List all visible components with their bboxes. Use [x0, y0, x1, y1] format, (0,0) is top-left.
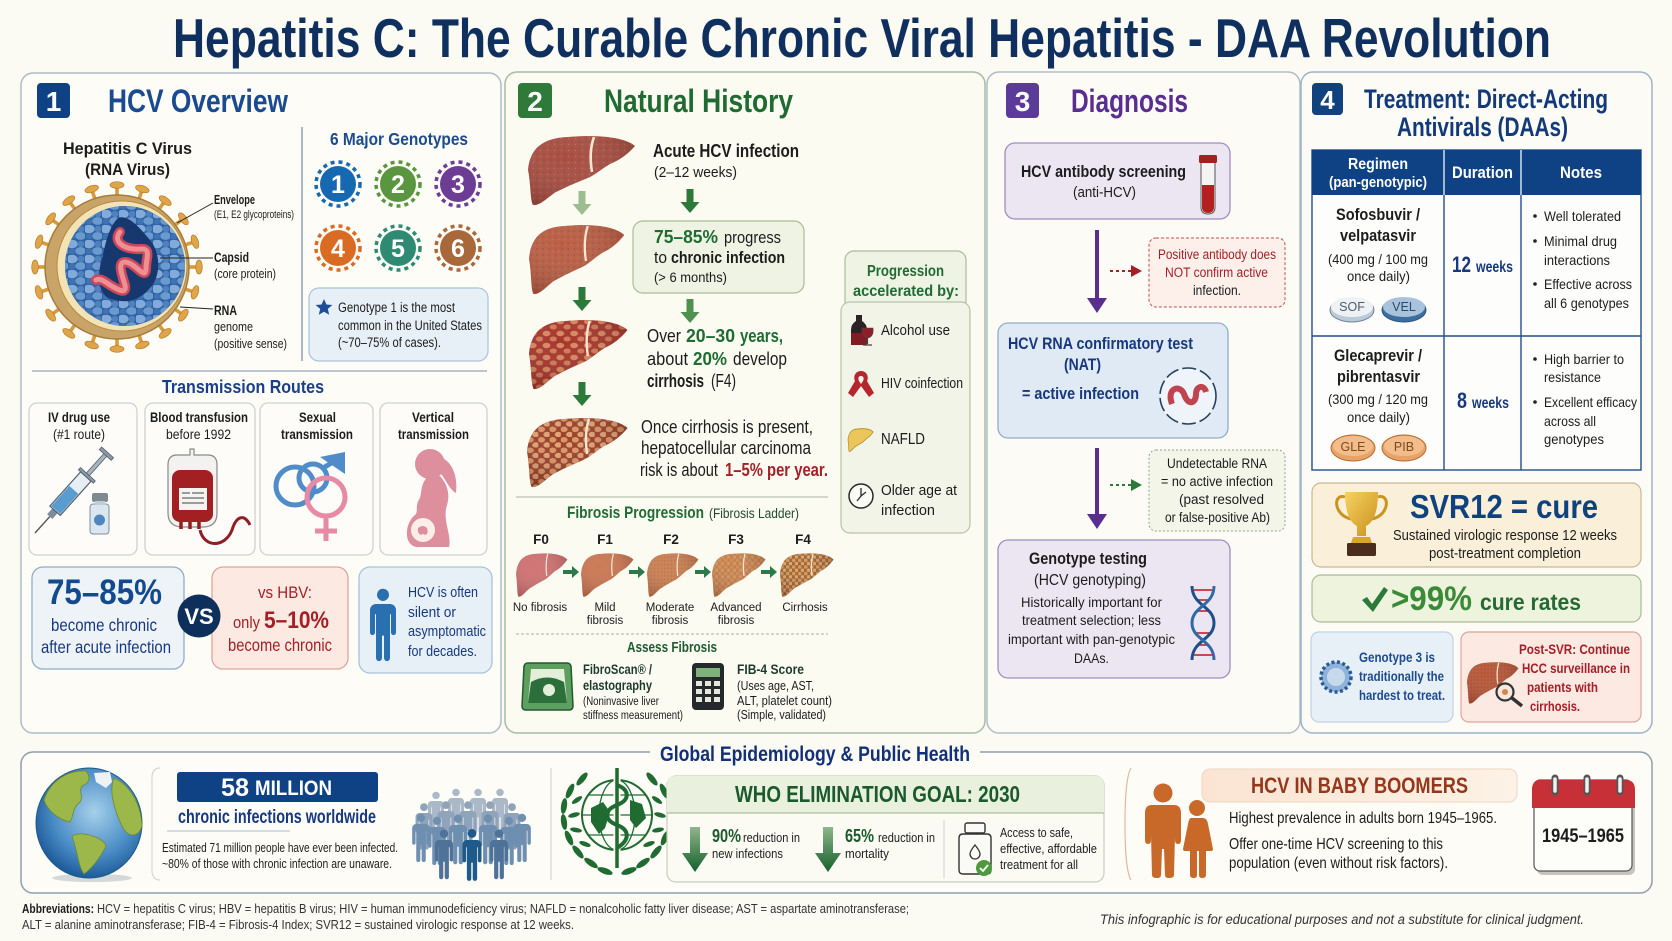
- stat: vs HBV: vs HBV:: [258, 584, 312, 602]
- callout: silent infection: for decades.: [408, 643, 477, 660]
- callout: genotype 1 note: [309, 288, 488, 361]
- callout: silent infection: silent or: [408, 604, 456, 621]
- sidebar: progression accelerators: Older age at: [881, 482, 958, 499]
- arrow: dashed red: [1110, 265, 1142, 277]
- row: sofosbuvir velpatasvir: Sofosbuvir /: [1336, 205, 1420, 224]
- step: antibody screening: [1005, 143, 1230, 219]
- footer: abbreviations: ALT = alanine aminotransferase; FIB-4 = Fibrosis-4 Index; SVR12 = sustained virologic response at 12 weeks.: [22, 918, 574, 932]
- card: blood transfusion: [145, 403, 255, 555]
- icon: virus: [1321, 662, 1351, 692]
- box: HCV in baby boomers: HCV IN BABY BOOMERS: [1251, 773, 1468, 798]
- callout: SVR12 equals cure: post-treatment completion: [1429, 546, 1581, 562]
- icon: pregnant silhouette: [407, 449, 456, 547]
- text: acute infection: (2–12 weeks): [654, 164, 737, 181]
- callout: post-SVR surveillance: cirrhosis.: [1530, 698, 1580, 714]
- box: progress to chronic: 75–85%: [654, 226, 718, 247]
- step: antibody screening: HCV antibody screening: [1021, 162, 1186, 181]
- row: glecaprevir pibrentasvir: High barrier to: [1544, 351, 1624, 367]
- virus labels: (E1, E2 glycoproteins): [214, 209, 294, 221]
- stat: 75-85 percent chronic: [32, 567, 184, 669]
- card: blood transfusion: Blood transfusion: [150, 410, 248, 425]
- box: HCV in baby boomers: Offer one-time HCV screening to this: [1229, 836, 1443, 853]
- callout: undetectable RNA: (past resolved: [1179, 492, 1264, 507]
- callout: post-SVR surveillance: Post-SVR: Continue: [1519, 641, 1630, 657]
- callout: silent infection: HCV is often: [408, 584, 478, 601]
- goal: 65 percent: 65%: [845, 826, 874, 846]
- goal: 90 percent: 90%: [712, 826, 741, 846]
- text: acute infection: [653, 141, 799, 181]
- row: glecaprevir pibrentasvir: genotypes: [1544, 431, 1604, 447]
- text: HCC risk: 1–5% per year.: [725, 460, 828, 480]
- icon: stage 4 liver: [527, 418, 628, 487]
- panel 2 heading: Natural History: [604, 83, 793, 119]
- goal: access to treatment: effective, affordable: [1000, 841, 1097, 856]
- row: glecaprevir pibrentasvir: [1328, 346, 1637, 461]
- icon: VS badge: VS: [184, 604, 214, 629]
- icon: person: [370, 589, 396, 661]
- arrow: dashed green: [1110, 479, 1142, 491]
- transmission routes heading: Transmission Routes: [162, 377, 324, 397]
- text: FIB-4 score: (Simple, validated): [737, 708, 826, 722]
- table: DAA regimens: Duration: [1452, 163, 1513, 182]
- card: vertical transmission: transmission: [398, 427, 469, 442]
- step: antibody screening: (anti-HCV): [1073, 184, 1136, 201]
- icon: DNA helix: [1192, 586, 1214, 660]
- card: blood transfusion: before 1992: [166, 427, 231, 442]
- text: FibroScan: [583, 662, 683, 722]
- stat: vs HBV: [212, 567, 348, 669]
- chart: fibrosis ladder: fibrosis: [587, 615, 623, 627]
- text: cirrhosis progression: [647, 325, 787, 391]
- virus labels: [160, 193, 294, 351]
- box: HCV in baby boomers: Highest prevalence in adults born 1945–1965.: [1229, 810, 1497, 827]
- box: progress to chronic: (> 6 months): [654, 269, 727, 285]
- callout: cure rates: >99%: [1391, 580, 1472, 618]
- panel 3 heading: 3: [1015, 86, 1030, 117]
- box: progress to chronic: progress: [724, 228, 781, 247]
- icon: crowd of people: [412, 789, 531, 881]
- stat: vs HBV: 5–10%: [264, 607, 329, 634]
- stat: 58 million: 58: [221, 774, 249, 802]
- stat: 75-85 percent chronic: become chronic: [51, 615, 157, 635]
- row: sofosbuvir velpatasvir: Minimal drug: [1544, 233, 1617, 249]
- card: sexual transmission: Sexual: [299, 410, 336, 425]
- card: sexual transmission: transmission: [281, 427, 353, 442]
- callout: silent infection: [359, 567, 492, 673]
- callout: undetectable RNA: [1149, 450, 1285, 531]
- row: glecaprevir pibrentasvir: 8: [1457, 388, 1467, 413]
- callout: SVR12 equals cure: Sustained virologic response 12 weeks: [1393, 528, 1617, 544]
- callout: genotype 1 note: (~70–75% of cases).: [338, 335, 441, 350]
- panel 2 heading: 2: [527, 86, 543, 117]
- row: sofosbuvir velpatasvir: weeks: [1475, 259, 1513, 276]
- panel 3 heading: [1006, 83, 1188, 119]
- icon: syringe and vial: [28, 446, 115, 540]
- row: sofosbuvir velpatasvir: (400 mg / 100 mg: [1328, 251, 1428, 267]
- callout: undetectable RNA: Undetectable RNA: [1167, 456, 1267, 471]
- icon: VS badge: [178, 594, 220, 638]
- arrows: natural history flow: [572, 189, 700, 406]
- stat: 75-85 percent chronic: after acute infection: [41, 637, 171, 657]
- step: genotype testing: important with pan-genotypic: [1008, 631, 1175, 647]
- goal: 90 percent: new infections: [712, 846, 783, 861]
- icon: SOF and VEL pills: VEL: [1392, 300, 1416, 314]
- sidebar: progression accelerators: Progression: [867, 263, 944, 280]
- text: cirrhosis progression: years,: [740, 325, 783, 346]
- row: glecaprevir pibrentasvir: Glecaprevir /: [1334, 346, 1422, 365]
- row: sofosbuvir velpatasvir: Effective across: [1544, 276, 1632, 292]
- arrow: to RNA test: [1087, 230, 1107, 313]
- icon: check mark: [1362, 587, 1388, 612]
- text: HCC risk: [640, 417, 828, 480]
- card: vertical transmission: Vertical: [412, 410, 454, 425]
- icons: six genotype badges: 2: [391, 171, 405, 199]
- goal: access to treatment: treatment for all: [1000, 857, 1078, 872]
- icon: fatty liver: [848, 429, 873, 451]
- footer: abbreviations: [22, 902, 909, 932]
- goal: 90 percent: reduction in: [743, 831, 800, 845]
- panel: 1 HCV overview: [21, 73, 501, 733]
- icon: SOF and VEL pills: [1330, 297, 1426, 322]
- icon: HCV virus particle: [32, 182, 202, 352]
- chart: fibrosis ladder: fibrosis: [652, 615, 688, 627]
- callout: post-SVR surveillance: patients with: [1527, 679, 1598, 695]
- goal: 65 percent: reduction in: [878, 831, 935, 845]
- stat: 58 million: ~80% of those with chronic infection are unaware.: [162, 856, 392, 871]
- box: HCV in baby boomers: [1202, 769, 1517, 872]
- box: progress to chronic: [633, 221, 804, 293]
- card: vertical transmission: [380, 403, 487, 555]
- icons: six genotype badges: 5: [391, 235, 405, 263]
- icon: trophy: [1337, 492, 1386, 556]
- icons: six genotype badges: 4: [331, 235, 345, 263]
- stat: 58 million: MILLION: [255, 777, 332, 800]
- icon: stage 2 liver: [529, 225, 624, 294]
- step: RNA confirmatory test: (NAT): [1064, 356, 1101, 374]
- goal: 65 percent: mortality: [845, 846, 889, 861]
- text: acute infection: Acute HCV infection: [653, 141, 799, 161]
- row: sofosbuvir velpatasvir: velpatasvir: [1340, 226, 1416, 245]
- icon: calendar 1945-1965: 1945–1965: [1542, 826, 1624, 847]
- icons: six genotype badges: 6: [451, 235, 465, 263]
- chart: fibrosis ladder: F2: [663, 532, 679, 547]
- icon: GLE and PIB pills: [1331, 435, 1426, 461]
- icon: calculator: [692, 663, 724, 710]
- genotypes heading: 6 Major Genotypes: [330, 129, 468, 149]
- icons: six genotype badges: 1: [331, 171, 345, 199]
- icon: stage 1 liver: [528, 136, 635, 205]
- panel 1 heading: HCV Overview: [108, 83, 288, 119]
- callout: genotype 1 note: common in the United States: [338, 318, 482, 333]
- callout: antibody caveat: Positive antibody does: [1158, 247, 1276, 262]
- text: cirrhosis progression: Over: [647, 325, 681, 346]
- panel: 4 treatment: [1301, 72, 1652, 733]
- chart: fibrosis ladder: No fibrosis: [513, 602, 567, 614]
- table: DAA regimens: [1312, 150, 1641, 470]
- icon: alcohol: [851, 315, 873, 345]
- text: FIB-4 score: FIB-4 Score: [737, 662, 804, 677]
- table: DAA regimens: Regimen: [1348, 156, 1408, 173]
- card: IV drug use: [28, 403, 137, 555]
- icon: adult and child: [1145, 784, 1213, 878]
- icon: stage 3 liver: [529, 320, 627, 389]
- footer: disclaimer: This infographic is for educational purposes and not a substitute for clinical judgment.: [1100, 912, 1584, 927]
- icon: interlocked gender symbols: [276, 452, 345, 541]
- panel 4 heading: 4: [1320, 85, 1335, 115]
- footer: abbreviations: Abbreviations:: [22, 902, 94, 916]
- panel: 2 natural history: [505, 72, 985, 733]
- step: genotype testing: (HCV genotyping): [1034, 572, 1146, 589]
- callout: post-SVR surveillance: HCC surveillance in: [1522, 660, 1630, 676]
- callout: undetectable RNA: or false-positive Ab): [1165, 510, 1270, 525]
- virus labels: (positive sense): [214, 337, 287, 351]
- virus diagram title: Hepatitis C Virus: [63, 139, 192, 158]
- icons: six genotype badges: [316, 162, 480, 270]
- callout: antibody caveat: infection.: [1193, 283, 1241, 298]
- virus diagram title: (RNA Virus): [85, 160, 170, 179]
- row: glecaprevir pibrentasvir: Excellent efficacy: [1544, 394, 1637, 410]
- panel 2 heading: [518, 83, 793, 119]
- callout: post-SVR surveillance: [1461, 632, 1641, 722]
- goal: 65 percent: [815, 826, 935, 872]
- box: progress to chronic: to: [654, 248, 667, 267]
- callout: undetectable RNA: = no active infection: [1161, 474, 1273, 489]
- chart: fibrosis ladder: Advanced: [710, 602, 762, 614]
- text: HCC risk: Once cirrhosis is present,: [641, 417, 813, 437]
- icon: blood tube: [1199, 155, 1217, 214]
- panel 1 heading: [37, 83, 288, 119]
- text: cirrhosis progression: about: [647, 348, 688, 369]
- chart: fibrosis ladder: F4: [795, 532, 811, 547]
- row: glecaprevir pibrentasvir: across all: [1544, 413, 1596, 429]
- text: HCC risk: risk is about: [640, 460, 718, 480]
- text: cirrhosis progression: (F4): [711, 370, 736, 391]
- sidebar: progression accelerators: NAFLD: [881, 431, 925, 448]
- box: WHO elimination goal: [667, 776, 1104, 882]
- callout: genotype 3: hardest to treat.: [1359, 687, 1445, 703]
- table: DAA regimens: (pan-genotypic): [1329, 175, 1427, 191]
- sidebar: progression accelerators: Alcohol use: [881, 322, 950, 339]
- icon: WHO emblem: [560, 768, 674, 877]
- virus labels: Envelope: [214, 193, 255, 207]
- goal: access to treatment: Access to safe,: [1000, 825, 1073, 840]
- icon: clock: [849, 484, 873, 508]
- text: cirrhosis progression: 20%: [693, 348, 727, 369]
- box: progress to chronic: chronic infection: [671, 248, 785, 267]
- text: FibroScan: stiffness measurement): [583, 710, 683, 722]
- box: HCV in baby boomers: population (even without risk factors).: [1229, 855, 1448, 872]
- callout: cure rates: [1312, 575, 1641, 622]
- goal: access to treatment: [959, 823, 1097, 876]
- step: RNA confirmatory test: [998, 323, 1228, 438]
- text: FibroScan: elastography: [583, 678, 652, 693]
- chart: fibrosis ladder: fibrosis: [718, 615, 754, 627]
- row: glecaprevir pibrentasvir: weeks: [1471, 395, 1509, 412]
- callout: antibody caveat: NOT confirm active: [1165, 265, 1268, 280]
- stat: 75-85 percent chronic: 75–85%: [47, 573, 162, 612]
- footer: abbreviations: HCV = hepatitis C virus; HBV = hepatitis B virus; HIV = human immunodeficiency virus; NAFLD = nonalcoholic fatty liver disease; AST = aspartate aminotransferase;: [97, 902, 909, 916]
- row: glecaprevir pibrentasvir: pibrentasvir: [1337, 367, 1420, 386]
- virus labels: genome: [214, 320, 253, 334]
- text: HCC risk: hepatocellular carcinoma: [641, 438, 812, 458]
- row: sofosbuvir velpatasvir: 12: [1452, 252, 1471, 277]
- fibrosis heading: Fibrosis Progression: [567, 503, 704, 522]
- panel heading: Global Epidemiology & Public Health: [660, 743, 970, 766]
- panel 4 heading: Treatment: Direct-Acting: [1364, 84, 1608, 114]
- callout: genotype 1 note: Genotype 1 is the most: [338, 300, 455, 315]
- table: DAA regimens: Notes: [1560, 163, 1602, 182]
- chart: fibrosis ladder: Moderate: [646, 602, 694, 614]
- sidebar: progression accelerators: accelerated by:: [853, 283, 959, 300]
- stat: 58 million: Estimated 71 million people have ever been infected.: [162, 840, 398, 855]
- step: genotype testing: Historically important for: [1021, 594, 1162, 610]
- icon: virus with RNA: [1160, 368, 1216, 424]
- callout: genotype 3: traditionally the: [1359, 668, 1444, 684]
- icon: globe: [36, 768, 142, 882]
- fibrosis heading: (Fibrosis Ladder): [709, 506, 799, 521]
- chart: fibrosis ladder: F0: [533, 532, 549, 547]
- chart: fibrosis ladder: Cirrhosis: [782, 602, 828, 614]
- text: FibroScan: FibroScan® /: [583, 662, 652, 677]
- chart: fibrosis ladder: Mild: [594, 602, 616, 614]
- icon: HIV ribbon: [848, 371, 874, 397]
- panel: 3 diagnosis: [987, 72, 1300, 733]
- icon: SOF and VEL pills: SOF: [1339, 300, 1365, 314]
- row: glecaprevir pibrentasvir: once daily): [1347, 409, 1410, 425]
- card: IV drug use: IV drug use: [48, 410, 110, 425]
- virus labels: RNA: [214, 303, 237, 318]
- card: IV drug use: (#1 route): [53, 427, 105, 442]
- icon: FibroScan ultrasound: [522, 663, 573, 710]
- icon: liver with magnifier: [1467, 662, 1522, 706]
- goal: 90 percent: [682, 826, 800, 872]
- chart: fibrosis ladder: F1: [597, 532, 613, 547]
- stat: 58 million: [162, 772, 398, 871]
- assess fibrosis heading: Assess Fibrosis: [627, 640, 717, 656]
- text: cirrhosis progression: cirrhosis: [647, 370, 704, 391]
- panel: global epidemiology: [21, 743, 1652, 893]
- chart: fibrosis ladder: [513, 532, 834, 627]
- stat: vs HBV: become chronic: [228, 635, 332, 655]
- callout: cure rates: cure rates: [1480, 589, 1581, 615]
- sidebar: progression accelerators: [841, 251, 970, 533]
- callout: silent infection: asymptomatic: [408, 623, 486, 640]
- step: genotype testing: Genotype testing: [1029, 550, 1147, 568]
- icon: GLE and PIB pills: PIB: [1394, 440, 1414, 454]
- callout: SVR12 equals cure: SVR12 = cure: [1410, 488, 1598, 525]
- chart: fibrosis ladder: F3: [728, 532, 744, 547]
- stat: vs HBV: only: [233, 614, 261, 632]
- box: WHO elimination goal: WHO ELIMINATION GOAL: 2030: [735, 781, 1020, 807]
- row: sofosbuvir velpatasvir: once daily): [1347, 268, 1410, 284]
- sidebar: progression accelerators: HIV coinfection: [881, 376, 963, 392]
- virus labels: Capsid: [214, 250, 249, 265]
- sidebar: progression accelerators: infection: [881, 502, 935, 519]
- virus diagram title: [63, 139, 192, 179]
- row: glecaprevir pibrentasvir: resistance: [1544, 369, 1601, 385]
- panel 4 heading: [1312, 83, 1608, 142]
- icon: blood bag: [168, 449, 250, 544]
- row: sofosbuvir velpatasvir: interactions: [1544, 252, 1610, 268]
- text: cirrhosis progression: develop: [733, 348, 787, 369]
- callout: SVR12 equals cure: [1312, 483, 1641, 567]
- text: FIB-4 score: [737, 662, 832, 722]
- panel 3 heading: Diagnosis: [1071, 83, 1188, 119]
- icons: six genotype badges: 3: [451, 171, 465, 199]
- step: RNA confirmatory test: = active infection: [1022, 384, 1139, 403]
- text: FIB-4 score: ALT, platelet count): [737, 694, 832, 708]
- icon: calendar 1945-1965: [1532, 778, 1635, 875]
- row: sofosbuvir velpatasvir: Well tolerated: [1544, 208, 1621, 224]
- icon: GLE and PIB pills: GLE: [1340, 440, 1366, 454]
- callout: antibody caveat: [1149, 238, 1285, 307]
- callout: genotype 3: Genotype 3 is: [1359, 649, 1435, 665]
- text: cirrhosis progression: 20–30: [686, 325, 735, 346]
- arrow: to genotype testing: [1087, 448, 1107, 529]
- row: sofosbuvir velpatasvir: [1328, 205, 1632, 322]
- stat: 58 million: chronic infections worldwide: [178, 806, 376, 828]
- step: RNA confirmatory test: HCV RNA confirmatory test: [1008, 335, 1193, 353]
- virus labels: (core protein): [214, 267, 276, 281]
- callout: genotype 3: [1311, 632, 1453, 722]
- card: sexual transmission: [260, 403, 373, 555]
- step: genotype testing: DAAs.: [1074, 650, 1109, 666]
- text: FibroScan: (Noninvasive liver: [583, 696, 659, 708]
- panel 1 heading: 1: [46, 86, 61, 117]
- step: genotype testing: treatment selection; less: [1022, 612, 1161, 628]
- text: FIB-4 score: (Uses age, AST,: [737, 679, 814, 693]
- step: genotype testing: [998, 540, 1230, 678]
- panel 4 heading: Antivirals (DAAs): [1397, 112, 1568, 142]
- row: glecaprevir pibrentasvir: (300 mg / 120 mg: [1328, 391, 1428, 407]
- row: sofosbuvir velpatasvir: all 6 genotypes: [1544, 295, 1629, 311]
